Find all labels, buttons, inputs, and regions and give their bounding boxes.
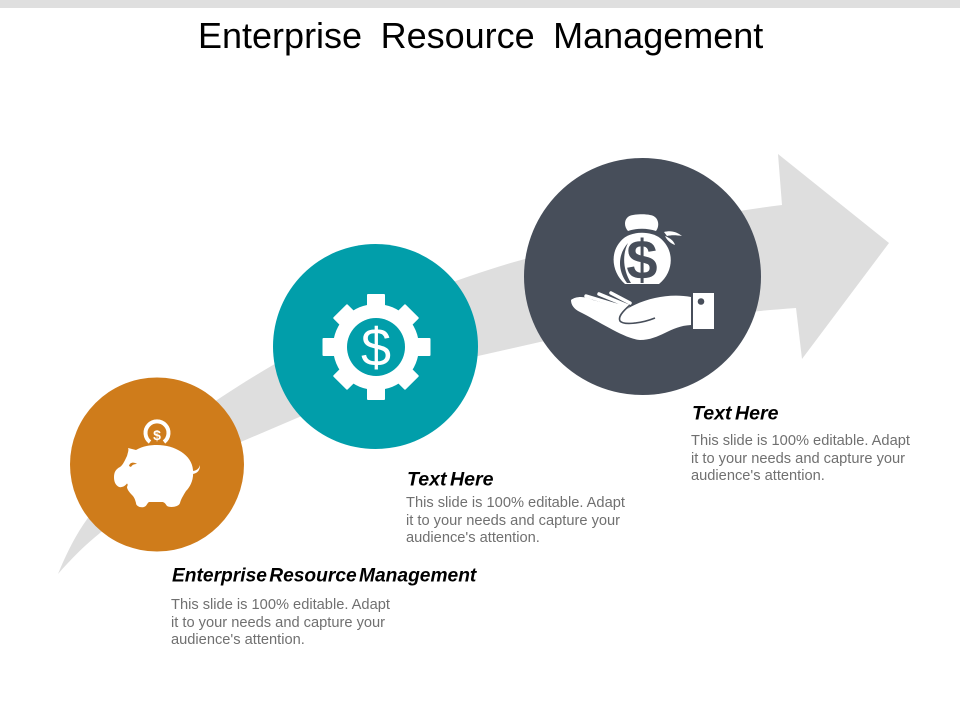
text block: Text Here right: audience's attention.	[691, 468, 825, 484]
text block: Enterprise Resource Management	[171, 566, 478, 648]
text block: Text Here middle: Text Here	[407, 468, 494, 490]
icon: gear with dollar	[322, 294, 430, 400]
text block: Text Here middle: it to your needs and capture your	[406, 513, 620, 529]
text block: Text Here middle	[406, 468, 625, 546]
circle: teal	[273, 244, 478, 449]
title: Enterprise Resource Management	[198, 15, 763, 56]
icon: piggy bank	[114, 421, 200, 507]
text block: Enterprise Resource Management: This slide is 100% editable. Adapt	[171, 597, 390, 613]
panel: step 3 money bag in hand	[524, 158, 761, 395]
circle: orange	[70, 378, 244, 552]
text block: Text Here right	[691, 402, 910, 484]
text block: Text Here right: it to your needs and capture your	[691, 451, 905, 467]
text block: Text Here middle: audience's attention.	[406, 530, 540, 546]
icon: money bag and hand	[571, 214, 714, 340]
text block: Enterprise Resource Management: Enterprise Resource Management	[172, 566, 478, 586]
panel: step 1 piggy bank	[70, 378, 244, 552]
panel: step 2 gear	[273, 244, 478, 449]
icon: gear with dollar: $	[361, 318, 391, 378]
text block: Text Here right: This slide is 100% editable. Adapt	[691, 433, 910, 449]
text block: Enterprise Resource Management: audience's attention.	[171, 632, 305, 648]
text block: Text Here right: Text Here	[692, 402, 779, 424]
text block: Enterprise Resource Management: it to your needs and capture your	[171, 615, 385, 631]
arrow	[58, 154, 889, 574]
circle: slate	[524, 158, 761, 395]
text block: Text Here middle: This slide is 100% editable. Adapt	[406, 495, 625, 511]
icon: money bag and hand: $	[626, 228, 658, 291]
icon: piggy bank: $	[153, 427, 161, 443]
